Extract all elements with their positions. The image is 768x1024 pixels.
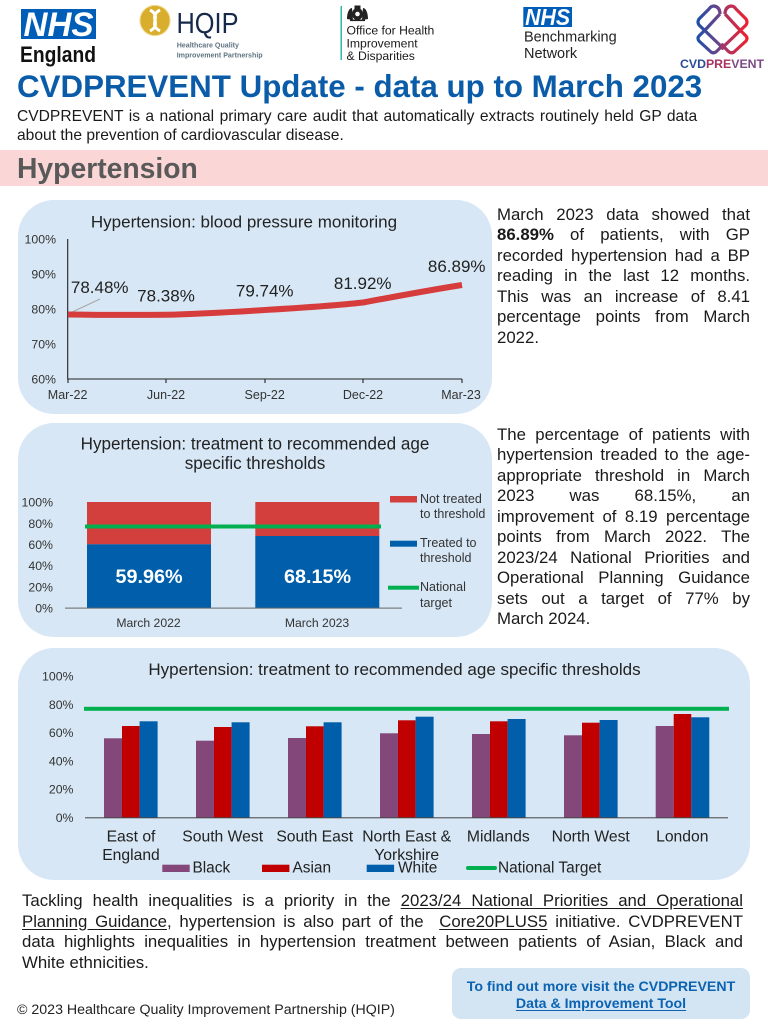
logo: HQIP — [140, 5, 263, 59]
legend: Asian — [292, 860, 331, 877]
y axis labels: 80% — [28, 517, 53, 531]
x axis labels: Mar-22 — [48, 388, 87, 402]
panel: blood pressure monitoring line chart — [18, 200, 492, 414]
text: treatment commentary: points from March 2022. The — [497, 527, 750, 546]
x axis labels: Sep-22 — [245, 388, 285, 402]
y axis labels: 0% — [35, 602, 53, 616]
logo: HQIP: Improvement Partnership — [177, 51, 263, 59]
legend: Black — [192, 860, 230, 877]
bar value labels: 59.96% — [115, 566, 183, 588]
logo: NHS Benchmarking Network — [523, 4, 617, 62]
logo: NHS Benchmarking Network: Benchmarking — [524, 30, 617, 46]
category labels: East of — [107, 829, 156, 846]
y axis labels: 20% — [49, 782, 74, 796]
category labels: South West — [182, 829, 264, 846]
category labels: South East — [276, 829, 354, 846]
text: treatment commentary: 2023/24 National Priorities and — [497, 548, 750, 566]
text: blood pressure monitoring commentary: reading in the last 12 months. — [497, 266, 750, 285]
logo: HQIP: Healthcare Quality — [177, 42, 239, 50]
legend: Treated to — [420, 536, 477, 550]
chart title: Hypertension: treatment to recommended age specific thresholds — [148, 660, 641, 679]
text: blood pressure monitoring commentary: March 2023 data showed that — [497, 204, 750, 224]
section heading: Hypertension: Hypertension — [17, 152, 198, 184]
y axis labels: 100% — [42, 670, 74, 684]
logo: NHS England — [20, 6, 96, 67]
legend — [388, 492, 485, 610]
national target line — [84, 707, 729, 711]
y axis labels: 40% — [28, 559, 53, 573]
data labels — [71, 257, 486, 306]
text: treatment commentary: improvement of 8.19 percentage — [497, 506, 750, 526]
x axis labels: Dec-22 — [343, 388, 383, 402]
bars: March 2022 — [87, 502, 211, 608]
y axis labels: 80% — [49, 698, 74, 712]
intro text — [17, 108, 698, 144]
text: health inequalities paragraph — [22, 891, 743, 972]
data line — [68, 285, 462, 315]
y axis labels: 100% — [25, 233, 56, 247]
x axis labels: Mar-23 — [441, 388, 481, 402]
section heading: Hypertension — [0, 150, 768, 186]
y axis labels: 0% — [56, 811, 74, 825]
legend: to threshold — [420, 507, 485, 521]
bar value labels — [115, 566, 351, 588]
chart title: specific thresholds — [185, 454, 325, 473]
legend: National Target — [498, 860, 602, 877]
copyright: © 2023 Healthcare Quality Improvement Partnership (HQIP) — [17, 1002, 395, 1018]
category labels — [102, 829, 708, 864]
logo: NHS Benchmarking Network: Network — [524, 46, 578, 62]
text: blood pressure monitoring commentary: 86.89% of patients, with GP — [497, 225, 750, 244]
text: treatment commentary: Operational Planning Guidance — [497, 568, 750, 587]
logo: NHS England: NHS — [24, 6, 94, 44]
data labels: 78.38% — [137, 287, 195, 306]
y axis labels: 80% — [31, 302, 56, 316]
baseline — [65, 608, 402, 609]
axes — [68, 239, 462, 383]
x axis labels: March 2022 — [116, 616, 181, 630]
logo: Office for Health Improvement and Disparities: Office for Health — [346, 24, 434, 38]
y axis labels — [22, 496, 53, 616]
intro text: about the prevention of cardiovascular disease. — [17, 127, 344, 144]
legend: target — [420, 596, 452, 610]
y axis labels: 100% — [22, 496, 53, 510]
y axis labels: 60% — [31, 372, 56, 386]
title: CVDPREVENT Update - data up to March 2023 — [17, 69, 702, 104]
data labels: 86.89% — [428, 257, 486, 276]
logo: CVDPREVENT: CVDPREVENT — [680, 57, 765, 71]
logo: HQIP: HQIP — [176, 8, 238, 40]
bar value labels: 68.15% — [284, 566, 351, 588]
x axis labels: Jun-22 — [147, 388, 185, 402]
y axis labels: 70% — [31, 338, 56, 352]
legend: Not treated — [420, 492, 482, 506]
logo: NHS Benchmarking Network: NHS — [525, 4, 571, 30]
y axis labels — [25, 233, 56, 386]
legend — [162, 860, 602, 877]
text: treatment commentary: hypertension treaded to the age- — [497, 445, 750, 464]
category labels: London — [656, 829, 708, 846]
bars: Black — [104, 726, 674, 818]
panel: regional ethnicity bar chart — [18, 648, 750, 880]
text: treatment commentary: appropriate threshold in March — [497, 466, 750, 484]
text: treatment commentary — [497, 424, 750, 628]
legend: White — [398, 860, 437, 877]
bars: March 2023 — [255, 502, 379, 608]
legend: National — [420, 580, 466, 594]
callout: link to data and improvement tool: Data & Improvement Tool — [516, 994, 686, 1010]
text: treatment commentary: March 2024. — [497, 609, 590, 628]
data labels: 79.74% — [236, 282, 294, 301]
y axis labels: 60% — [28, 538, 53, 552]
category labels: England — [102, 847, 160, 864]
y axis labels: 90% — [31, 268, 56, 282]
text: blood pressure monitoring commentary: recorded hypertension had a BP — [497, 246, 750, 264]
y axis labels: 60% — [49, 726, 74, 740]
callout: link to data and improvement tool: To find out more visit the CVDPREVENT — [467, 978, 735, 994]
logo: Office for Health Improvement and Disparities: & Disparities — [346, 49, 415, 63]
y axis labels: 20% — [28, 580, 53, 594]
text: treatment commentary: sets out a target of 77% by — [497, 588, 750, 608]
y axis labels — [42, 670, 74, 825]
text: blood pressure monitoring commentary: 2022. — [497, 328, 539, 346]
text: health inequalities paragraph: Tackling health inequalities is a priority in the 2023/24 National Priorities and Operational — [22, 891, 743, 910]
text: health inequalities paragraph: Planning Guidance, hypertension is also part of the Core20PLUS5 initiative. CVDPREVENT — [22, 912, 743, 930]
data labels: 81.92% — [334, 274, 392, 293]
category labels: Midlands — [467, 829, 530, 846]
panel: treatment to threshold stacked bar chart — [18, 423, 492, 637]
chart title: Hypertension: treatment to recommended age — [81, 434, 429, 454]
y axis labels: 40% — [49, 754, 74, 768]
logo: Office for Health Improvement and Disparities — [340, 6, 434, 63]
text: blood pressure monitoring commentary: This was an increase of 8.41 — [497, 286, 750, 306]
logo: CVDPREVENT — [680, 4, 765, 71]
chart title: Hypertension: blood pressure monitoring — [91, 212, 397, 232]
text: blood pressure monitoring commentary: percentage points from March — [497, 307, 750, 326]
bars: Asian — [122, 714, 691, 818]
x axis labels — [116, 616, 349, 630]
bars: White — [140, 717, 709, 818]
category labels: North West — [552, 829, 630, 846]
data labels: 78.48% — [71, 278, 129, 297]
category labels: Yorkshire — [374, 847, 439, 864]
legend: threshold — [420, 551, 471, 565]
logo: NHS England: England — [20, 42, 96, 67]
logo: Office for Health Improvement and Disparities: Improvement — [346, 36, 418, 50]
text: treatment commentary: The percentage of patients with — [497, 424, 750, 444]
text: health inequalities paragraph: White ethnicities. — [22, 952, 149, 972]
baseline — [85, 817, 728, 818]
callout: link to data and improvement tool — [452, 968, 750, 1019]
text: health inequalities paragraph: data highlights inequalities in hypertension treatment between patients of Asian, Black and — [22, 932, 743, 951]
category labels: North East & — [362, 829, 452, 846]
x axis labels — [48, 388, 481, 402]
national target line — [85, 524, 381, 528]
leader line — [68, 299, 100, 314]
text: treatment commentary: 2023 was 68.15%, an — [497, 486, 750, 505]
x axis labels: March 2023 — [285, 616, 349, 630]
text: blood pressure monitoring commentary — [497, 204, 750, 346]
intro text: CVDPREVENT is a national primary care audit that automatically extracts routinely held GP data — [17, 108, 697, 125]
